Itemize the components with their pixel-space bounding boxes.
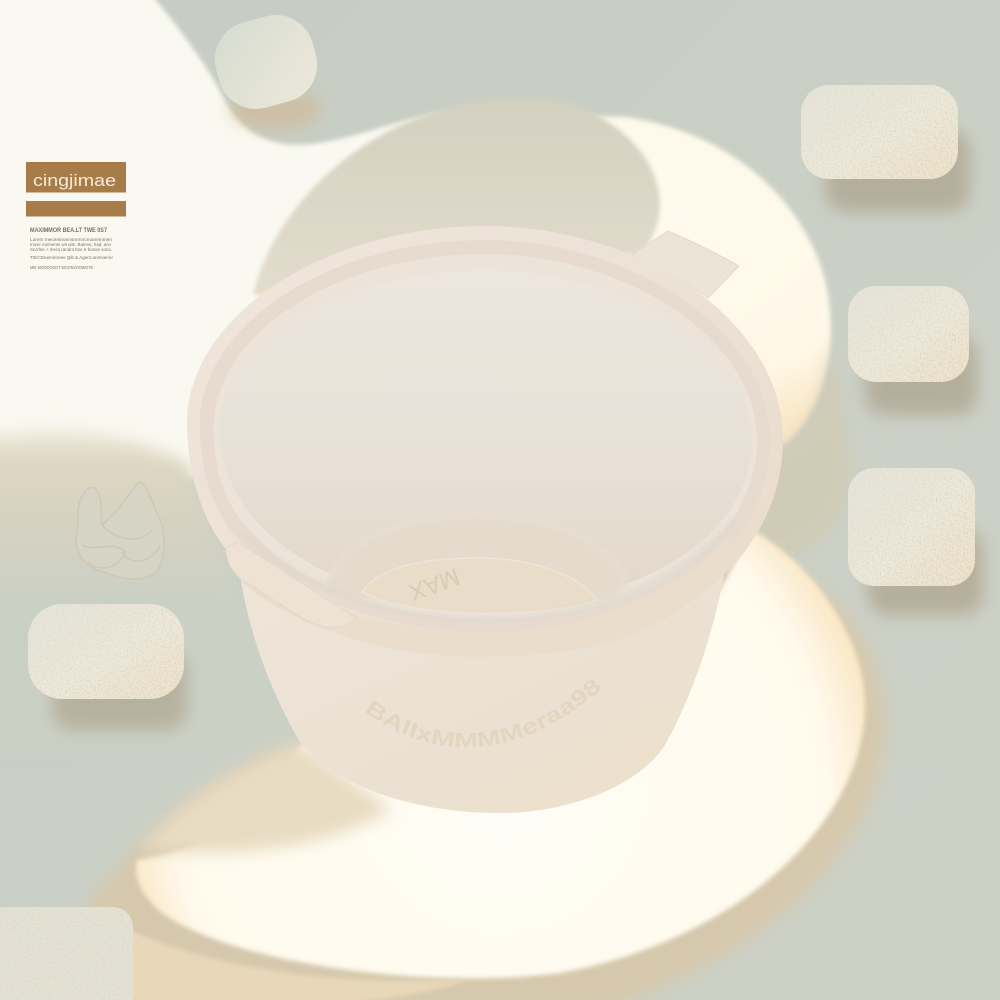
panel: warm cast shadow right of cup xyxy=(725,340,850,585)
panel: bottom warm band xyxy=(90,925,470,1000)
cup side handle xyxy=(226,542,356,627)
small text block: Lorem mecenimarnsnnrorcmanemmen xyxy=(30,237,113,242)
embossed text on cup body: BAIIxMMMMeraa98 xyxy=(366,680,600,748)
cup xyxy=(187,226,783,813)
pill right middle xyxy=(848,286,969,382)
pill right top shadow xyxy=(825,130,970,212)
pill left xyxy=(28,604,184,699)
cup interior xyxy=(219,270,752,606)
cup base floor xyxy=(362,558,597,613)
panel: shaded swoosh under cup left xyxy=(140,742,392,853)
icon: embossed floral mark xyxy=(76,482,164,579)
small text block: TIECDnemirones Qilt & Agent anmvennr xyxy=(30,255,114,260)
panel: cream light area, upper left xyxy=(0,0,445,480)
panel: soft shadow, left xyxy=(0,431,300,745)
embossed text: MAX: MAX xyxy=(405,562,463,606)
pill right middle shadow xyxy=(865,335,977,415)
small text block: Inose ronments wit uite. Bamno, had, ano xyxy=(30,242,111,247)
cup front lip band xyxy=(228,540,728,657)
secondary brown bar xyxy=(26,201,126,216)
pill left shadow xyxy=(52,650,187,730)
cup base ring xyxy=(322,516,626,603)
panel: lit blob behind cup xyxy=(255,113,831,445)
cup rim groove xyxy=(200,240,770,632)
panel: outer shadow of lower swoosh xyxy=(80,559,885,1000)
title bar xyxy=(26,162,126,192)
small text block: MIE MOOOCOOT WOONVOOWOTE xyxy=(30,265,93,270)
cup front rim highlight xyxy=(240,520,735,619)
pill right top xyxy=(801,85,958,179)
cup tab handle xyxy=(632,231,739,298)
small text block: Sno'lne. I mera randrs bne 5 bonoe sono xyxy=(30,247,111,252)
panel: circular shadow behind cup xyxy=(253,98,660,295)
pill bottom left xyxy=(0,907,133,1000)
pill top left shadow xyxy=(229,90,321,130)
pill top left xyxy=(206,7,326,117)
title text: cingjimae xyxy=(33,171,116,190)
small text block: MAXIMMOR BEA.LT TWE 0S7 xyxy=(30,228,108,234)
pill right lower shadow xyxy=(868,530,983,615)
cup body xyxy=(240,575,724,813)
cup rim inner lip xyxy=(214,254,757,620)
cup rim xyxy=(187,226,783,657)
pill right lower xyxy=(848,468,975,586)
small text block xyxy=(30,228,114,270)
panel: lit lower swoosh xyxy=(136,530,865,978)
